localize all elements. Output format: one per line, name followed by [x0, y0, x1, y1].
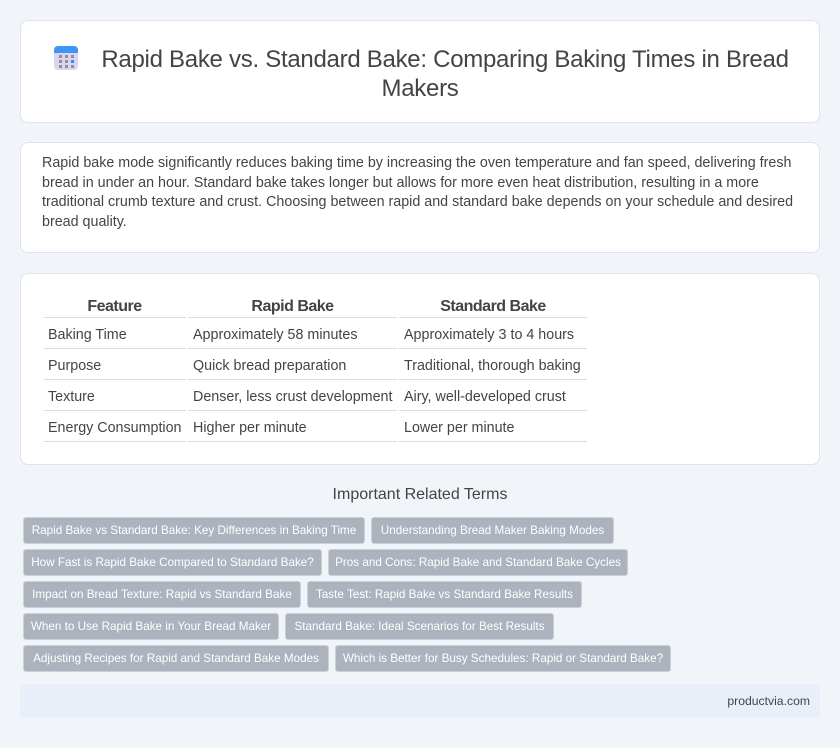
- table header: Feature: [87, 298, 142, 315]
- row: texture: [48, 389, 566, 405]
- tag: Standard Bake: Ideal Scenarios for Best Results: [294, 620, 545, 633]
- row: energy consumption: Lower per minute: [404, 420, 514, 436]
- tag: How Fast is Rapid Bake Compared to Standard Bake?: [31, 556, 314, 569]
- row: energy consumption: [48, 420, 514, 436]
- tag: [23, 613, 279, 640]
- table header: Rapid Bake: [251, 298, 334, 315]
- panel: intro text: [20, 142, 820, 253]
- row: baking time: Baking Time: [48, 327, 127, 343]
- row: baking time: Approximately 3 to 4 hours: [404, 327, 574, 343]
- panel: title card: [20, 20, 820, 123]
- table header: [87, 298, 546, 315]
- tag: Taste Test: Rapid Bake vs Standard Bake Results: [316, 588, 573, 601]
- title: Rapid Bake vs. Standard Bake: Comparing Baking Times in Bread: [101, 46, 789, 73]
- tag: [371, 517, 614, 544]
- tag: Understanding Bread Maker Baking Modes: [381, 524, 604, 537]
- text block: intro paragraph: bread in under an hour. Standard bake takes longer but allows for more even heat distribution, resulting in a more: [42, 174, 759, 190]
- tag: Which is Better for Busy Schedules: Rapid or Standard Bake?: [343, 652, 663, 665]
- tag list: [23, 517, 671, 672]
- row: baking time: [48, 327, 574, 343]
- row: texture: Airy, well-developed crust: [404, 389, 566, 405]
- footer text: productvia.com: [727, 694, 810, 708]
- row: purpose: Traditional, thorough baking: [404, 358, 581, 374]
- heading: important related terms: Important Related Terms: [333, 486, 507, 503]
- tag: [23, 581, 301, 608]
- row: baking time: Approximately 58 minutes: [193, 327, 358, 343]
- row: texture: Texture: [48, 389, 95, 405]
- text block: intro paragraph: [42, 155, 793, 230]
- tag: [23, 549, 322, 576]
- icon: calendar: [54, 46, 78, 70]
- footer bar: [20, 684, 820, 718]
- tag: Pros and Cons: Rapid Bake and Standard Bake Cycles: [335, 556, 621, 569]
- row: purpose: Purpose: [48, 358, 101, 374]
- title: [101, 46, 789, 102]
- table: comparison: [44, 298, 587, 442]
- tag: [23, 517, 365, 544]
- text block: intro paragraph: bread quality.: [42, 214, 127, 230]
- tag: Rapid Bake vs Standard Bake: Key Differences in Baking Time: [32, 524, 356, 537]
- row: texture: Denser, less crust development: [193, 389, 392, 405]
- tag: [328, 549, 628, 576]
- text block: intro paragraph: traditional crumb texture and crust. Choosing between rapid and standard bake depends on your schedule and desired: [42, 194, 793, 210]
- row: purpose: [48, 358, 581, 374]
- text block: intro paragraph: Rapid bake mode significantly reduces baking time by increasing the oven temperature and fan speed, delivering fresh: [42, 155, 791, 171]
- panel: comparison table: [20, 273, 820, 465]
- tag: Impact on Bread Texture: Rapid vs Standard Bake: [32, 588, 292, 601]
- tag: Adjusting Recipes for Rapid and Standard Bake Modes: [33, 652, 319, 665]
- row: energy consumption: Energy Consumption: [48, 420, 182, 436]
- tag: When to Use Rapid Bake in Your Bread Maker: [31, 620, 271, 633]
- tag: [23, 645, 329, 672]
- tag: [307, 581, 582, 608]
- table header: Standard Bake: [440, 298, 546, 315]
- tag: [285, 613, 554, 640]
- row: purpose: Quick bread preparation: [193, 358, 346, 374]
- title: Makers: [382, 75, 458, 102]
- row: energy consumption: Higher per minute: [193, 420, 307, 436]
- tag: [335, 645, 671, 672]
